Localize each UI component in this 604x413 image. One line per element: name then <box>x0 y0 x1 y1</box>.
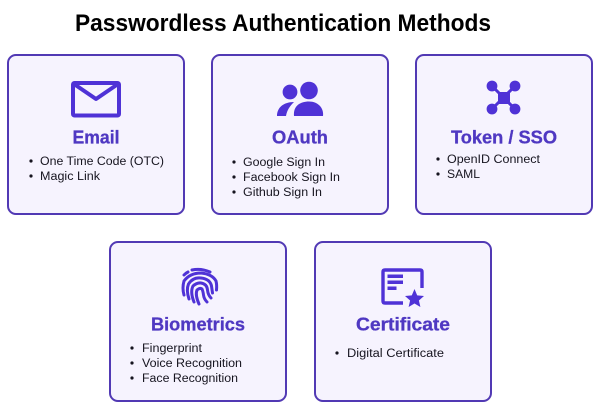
icon: network nodes <box>487 81 520 114</box>
list: oauth providers: Google Sign In <box>243 157 325 169</box>
heading: biometrics: Biometrics <box>151 314 245 334</box>
list: token standards: OpenID Connect <box>447 154 541 166</box>
panel: oauth <box>212 55 388 214</box>
list: biometric types <box>130 343 242 385</box>
icon: certificate with star <box>383 270 424 307</box>
list: oauth providers: Facebook Sign In <box>243 172 340 184</box>
icon: fingerprint <box>183 269 217 304</box>
panel: token / sso <box>416 55 592 214</box>
heading: email: Email <box>72 128 120 148</box>
heading: certificate: Certificate <box>356 314 450 334</box>
panel: biometrics <box>110 242 286 401</box>
list: oauth providers <box>232 157 340 199</box>
panel: email <box>8 55 184 214</box>
list: email methods: Magic Link <box>40 171 100 183</box>
list: certificate types: Digital Certificate <box>347 348 444 360</box>
list: token standards: SAML <box>447 169 481 181</box>
list: token standards <box>436 154 541 181</box>
panel: certificate <box>315 242 491 401</box>
list: biometric types: Voice Recognition <box>142 358 242 370</box>
icon: envelope <box>73 83 119 116</box>
list: email methods: One Time Code (OTC) <box>40 156 164 168</box>
list: email methods <box>29 156 164 183</box>
list: biometric types: Face Recognition <box>142 373 238 385</box>
icon: users <box>277 82 323 116</box>
title: Passwordless Authentication Methods <box>75 10 491 37</box>
list: oauth providers: Github Sign In <box>243 187 322 199</box>
list: biometric types: Fingerprint <box>142 343 203 355</box>
heading: oauth: OAuth <box>272 128 328 148</box>
heading: token / sso: Token / SSO <box>451 128 557 148</box>
